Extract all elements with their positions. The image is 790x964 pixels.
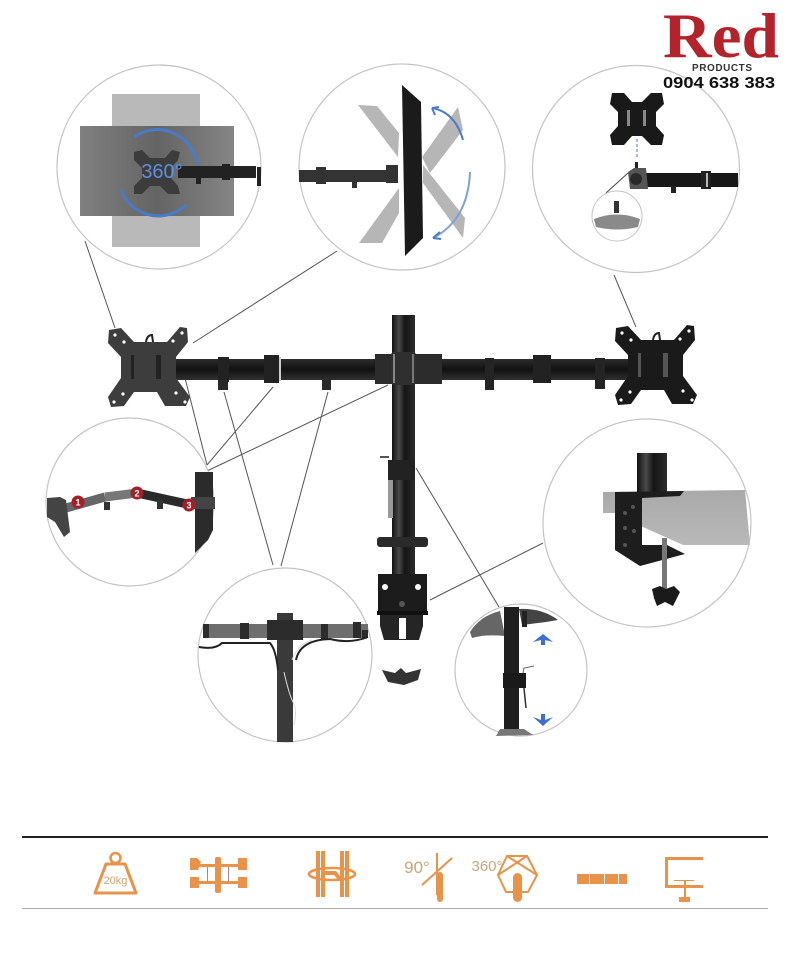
phone number: 0904 638 383 (663, 75, 775, 92)
leader lines (85, 241, 636, 607)
arm hooks (104, 500, 163, 510)
clamp bracket (615, 491, 685, 566)
pole (392, 315, 415, 577)
pole (277, 613, 293, 742)
logo wordmark: Red (663, 0, 779, 71)
marker 3: 3 (186, 500, 192, 510)
blue rotation arcs (121, 130, 197, 216)
pole (504, 607, 519, 735)
panel: quick release plate (532, 66, 740, 272)
logo subtitle: PRODUCTS (692, 63, 752, 74)
icon: 90 degree tilt (404, 853, 452, 902)
height collar (380, 456, 415, 518)
mounting plate (134, 150, 180, 194)
vertical monitor silhouette (112, 94, 200, 247)
icon: 360 degree swivel (471, 856, 537, 902)
monitor plate side (47, 497, 70, 537)
screw (662, 538, 667, 590)
icon: 90 degree tilt: 90° (404, 858, 430, 877)
bracket holes (623, 505, 636, 547)
360 degree label: 360° (141, 161, 183, 183)
icon: 20kg load (95, 853, 136, 893)
blue tilt arrows (432, 107, 470, 239)
base (496, 729, 533, 736)
clamp body (377, 574, 428, 640)
bracket (522, 611, 527, 627)
left arm arc (470, 611, 505, 638)
footer top rule (22, 836, 768, 838)
right arm arc (519, 609, 558, 625)
collar with lever (503, 666, 534, 708)
monitor side view (402, 85, 423, 256)
inset circle: release detail (592, 191, 642, 241)
footer bottom rule (22, 908, 768, 909)
icon: dual arm height (190, 857, 247, 893)
icon: arm bar (577, 874, 627, 884)
horizontal monitor silhouette (80, 126, 234, 216)
left arm (176, 354, 393, 390)
icon: desk clamp (665, 857, 703, 902)
panel: arm adjustment points (46, 418, 215, 586)
marker 1: 1 (75, 498, 81, 508)
logo: Red Products (663, 0, 779, 92)
pole (195, 472, 213, 553)
gap under desk (643, 530, 662, 545)
arm and head (628, 162, 738, 193)
right arm (414, 354, 640, 390)
icon: 20kg load: 20kg (104, 875, 127, 887)
panel: tilt (299, 64, 505, 270)
panel: 360 degree rotation (57, 65, 261, 269)
arm segment (299, 165, 398, 188)
panel: height adjustment (455, 604, 587, 736)
clamp foot (382, 668, 421, 685)
left VESA plate (108, 327, 190, 407)
folded arm (66, 493, 192, 508)
desk top (603, 490, 750, 545)
pointer to inset (606, 173, 628, 193)
central mount (108, 315, 697, 685)
panel: desk clamp (543, 419, 751, 627)
arm (203, 624, 368, 638)
cable guide disc (377, 537, 428, 547)
marker 3 (182, 498, 196, 512)
marker 2: 2 (134, 488, 140, 498)
cables (199, 637, 368, 670)
marker 2 (130, 486, 144, 500)
grey tilt silhouettes (358, 105, 465, 243)
icon: pole rotation (309, 851, 355, 897)
up arrow (533, 634, 553, 645)
dashed double arrow (636, 139, 638, 159)
right VESA plate (615, 325, 697, 405)
arm brackets (203, 620, 368, 640)
VESA plate (610, 93, 664, 145)
pole clamp (391, 352, 416, 385)
panel: cable management (198, 568, 372, 742)
icon: 360 degree swivel: 360° (471, 858, 503, 875)
arm segment (178, 164, 261, 186)
down arrow (533, 714, 553, 726)
marker 1 (72, 496, 84, 508)
knob (652, 586, 680, 606)
post (637, 453, 667, 493)
